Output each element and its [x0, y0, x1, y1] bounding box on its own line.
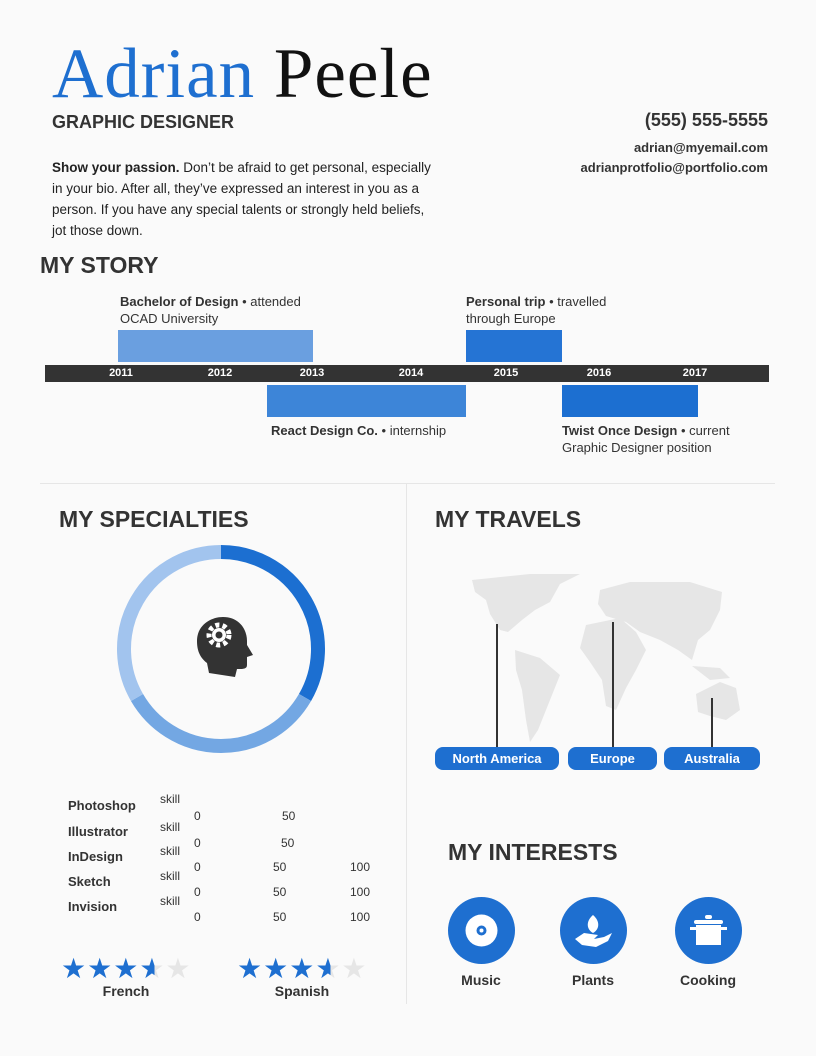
skills list: 50 [273, 860, 286, 874]
label: bachelor: OCAD University [120, 311, 218, 326]
year axis: 2011 [109, 367, 133, 379]
year axis: 2012 [208, 367, 232, 379]
skills list: Invision [68, 899, 117, 914]
icon: head with gear [197, 617, 253, 677]
skills list: Photoshop [68, 798, 136, 813]
timeline [45, 294, 769, 455]
skills list: 100 [350, 910, 370, 924]
label: bachelor: Bachelor of Design • attended [120, 294, 301, 309]
pill: europe: Europe [590, 751, 635, 766]
skills list: 0 [194, 860, 201, 874]
skills list: 0 [194, 910, 201, 924]
name title: Adrian Peele [52, 35, 433, 113]
year axis [45, 365, 769, 382]
skills list: skill [160, 820, 180, 834]
icon: plants [560, 897, 627, 964]
heading: my story: MY STORY [40, 252, 158, 278]
year axis: 2017 [683, 367, 707, 379]
pill: australia [664, 747, 760, 770]
skills list: 0 [194, 836, 201, 850]
pill: australia: Australia [684, 751, 740, 766]
bio text [52, 160, 431, 238]
year axis: 2016 [587, 367, 611, 379]
rating: french: French [103, 983, 149, 999]
skills list [68, 792, 370, 924]
job title: GRAPHIC DESIGNER [52, 112, 234, 132]
connector lines [496, 624, 498, 748]
skills list: 100 [350, 885, 370, 899]
year axis: 2015 [494, 367, 518, 379]
bio text: in your bio. After all, they’ve expressed an interest in you as a [52, 181, 419, 196]
skills list: skill [160, 792, 180, 806]
bio text: Show your passion. Don’t be afraid to get personal, especially [52, 160, 431, 175]
year axis: 2014 [399, 367, 423, 379]
label: bachelor [120, 294, 301, 326]
skills list: skill [160, 844, 180, 858]
skills list: 50 [273, 885, 286, 899]
contact info [580, 110, 768, 175]
heading: interests: MY INTERESTS [448, 839, 618, 865]
rating: spanish [237, 953, 368, 999]
label: twist: Twist Once Design • current [562, 423, 730, 438]
contact info: adrian@myemail.com [634, 140, 768, 155]
heading: travels: MY TRAVELS [435, 506, 581, 532]
bar: bachelor [118, 330, 313, 362]
rating: french [61, 953, 192, 999]
skills list: 100 [350, 860, 370, 874]
heading: specialties: MY SPECIALTIES [59, 506, 249, 532]
label: cooking: Cooking [680, 972, 736, 988]
label: personal trip: through Europe [466, 311, 556, 326]
skills list: 50 [281, 836, 294, 850]
icon: music [448, 897, 515, 964]
skills list: 0 [194, 809, 201, 823]
pill: europe [568, 747, 657, 770]
contact info: (555) 555-5555 [645, 110, 768, 130]
label: twist [562, 423, 730, 455]
skills list: 50 [282, 809, 295, 823]
world map [472, 574, 740, 742]
label: react: React Design Co. • internship [271, 423, 446, 438]
rating: spanish: ★★★★★ [237, 953, 368, 984]
skills list: skill [160, 869, 180, 883]
donut chart [117, 545, 325, 753]
bar: twist [562, 385, 698, 417]
bio text: person. If you have any special talents or strongly held beliefs, [52, 202, 424, 217]
year axis: 2013 [300, 367, 324, 379]
pill: north america: North America [452, 751, 542, 766]
skills list: skill [160, 894, 180, 908]
skills list: InDesign [68, 849, 123, 864]
skills list: 0 [194, 885, 201, 899]
label: personal trip [466, 294, 606, 326]
pill: north america [435, 747, 559, 770]
bar: react [267, 385, 466, 417]
contact info: adrianprotfolio@portfolio.com [581, 160, 768, 175]
bio text: jot those down. [52, 223, 143, 238]
label: plants: Plants [572, 972, 614, 988]
bar: trip [466, 330, 562, 362]
label: music: Music [461, 972, 501, 988]
skills list: 50 [273, 910, 286, 924]
skills list: Illustrator [68, 824, 128, 839]
rating: spanish: Spanish [275, 983, 329, 999]
label: personal trip: Personal trip • travelled [466, 294, 606, 309]
label: twist: Graphic Designer position [562, 440, 712, 455]
rating: french: ★★★★★ [61, 953, 192, 984]
icon: cooking [675, 897, 742, 964]
skills list: Sketch [68, 874, 111, 889]
